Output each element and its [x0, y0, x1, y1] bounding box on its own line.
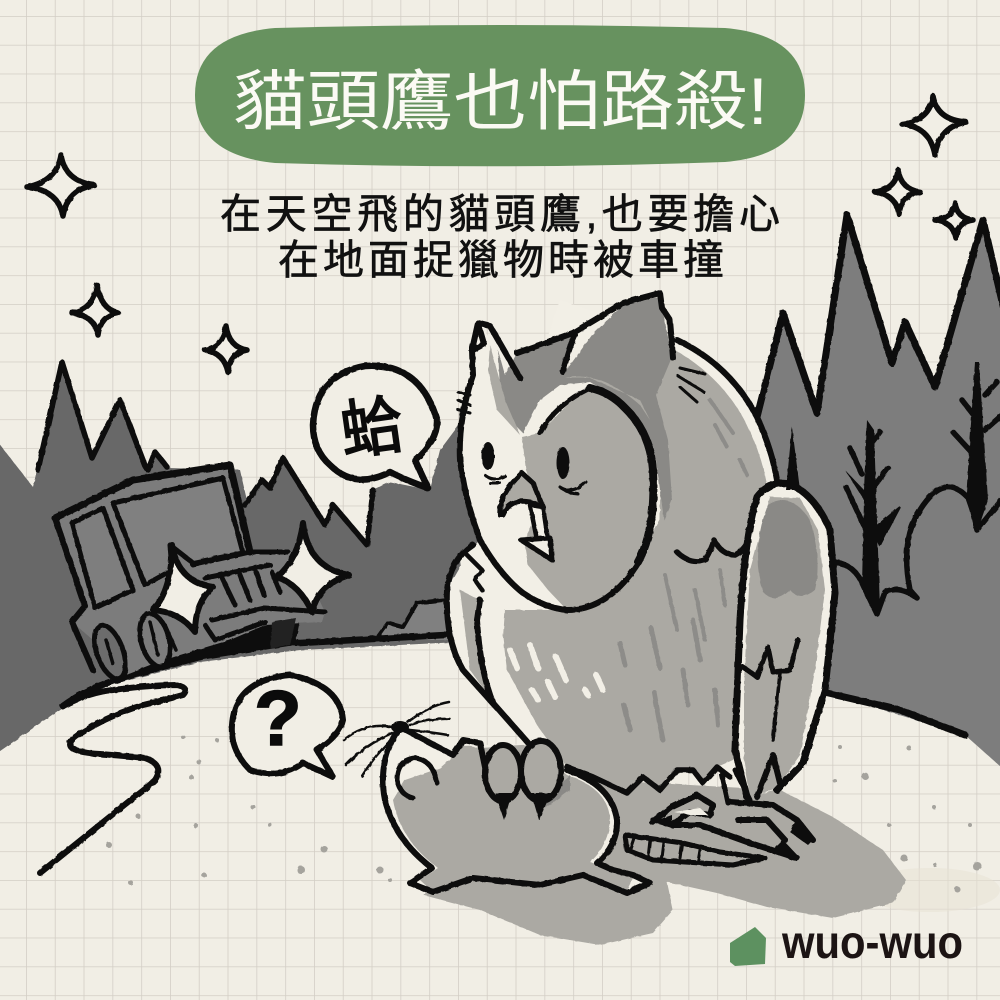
face grey side: [522, 391, 653, 610]
left wing outline: [447, 545, 530, 745]
logo wordmark: wuo-wuo: [781, 916, 963, 968]
speech bubble: question: [232, 675, 343, 777]
head dark patch: [498, 297, 672, 520]
grille and bumper: [193, 552, 325, 640]
car body: [55, 465, 325, 683]
rat tail: [625, 835, 765, 865]
logo: [730, 916, 963, 968]
ground line: [63, 600, 450, 706]
owl talons on mouse: [485, 741, 570, 820]
title text: 貓頭鷹也怕路殺!: [233, 64, 768, 138]
right forest silhouette: [740, 215, 1000, 775]
crash sparkles: [153, 523, 349, 632]
bare tree left: [845, 420, 900, 614]
chest ruff line: [677, 537, 750, 561]
speckles: [106, 735, 982, 892]
mouse ear: [397, 758, 437, 798]
bubble text: question mark: ?: [254, 674, 302, 762]
right wing: [733, 427, 835, 797]
owl eyes: [482, 442, 586, 494]
mouse: [344, 702, 650, 893]
front bushes outline: [835, 487, 1000, 614]
bare tree right: [953, 362, 1000, 532]
owl: [447, 293, 835, 797]
owl foot: [652, 770, 815, 860]
logo house icon: [730, 927, 766, 966]
subtitle: [220, 191, 780, 283]
title pill: [195, 25, 805, 166]
body bottom feather edge: [567, 767, 730, 793]
car shadow and wheels: [110, 590, 300, 680]
subtitle line one: 在天空飛的貓頭鷹,也要擔心: [220, 191, 780, 237]
speech bubble: huh: [313, 366, 437, 488]
wheels: [88, 621, 132, 683]
decorative sparkle stars: [27, 96, 973, 372]
bubble text: huh: 蛤: [336, 388, 409, 468]
left forest silhouette: [0, 362, 500, 758]
left wing tuft: [447, 545, 530, 743]
mouse body: [383, 727, 650, 893]
belly feather marks: [510, 400, 747, 740]
owl beak and mouth: [500, 473, 552, 560]
car windows: [72, 508, 133, 608]
subtitle line two: 在地面捉獵物時被車撞: [278, 237, 724, 283]
mouse nose and whiskers: [344, 702, 450, 776]
winding road: [40, 685, 185, 873]
owl body base: [460, 300, 790, 793]
shadow on ground: [423, 780, 906, 945]
owl head face white: [460, 323, 653, 610]
owl outlines: [460, 323, 640, 610]
